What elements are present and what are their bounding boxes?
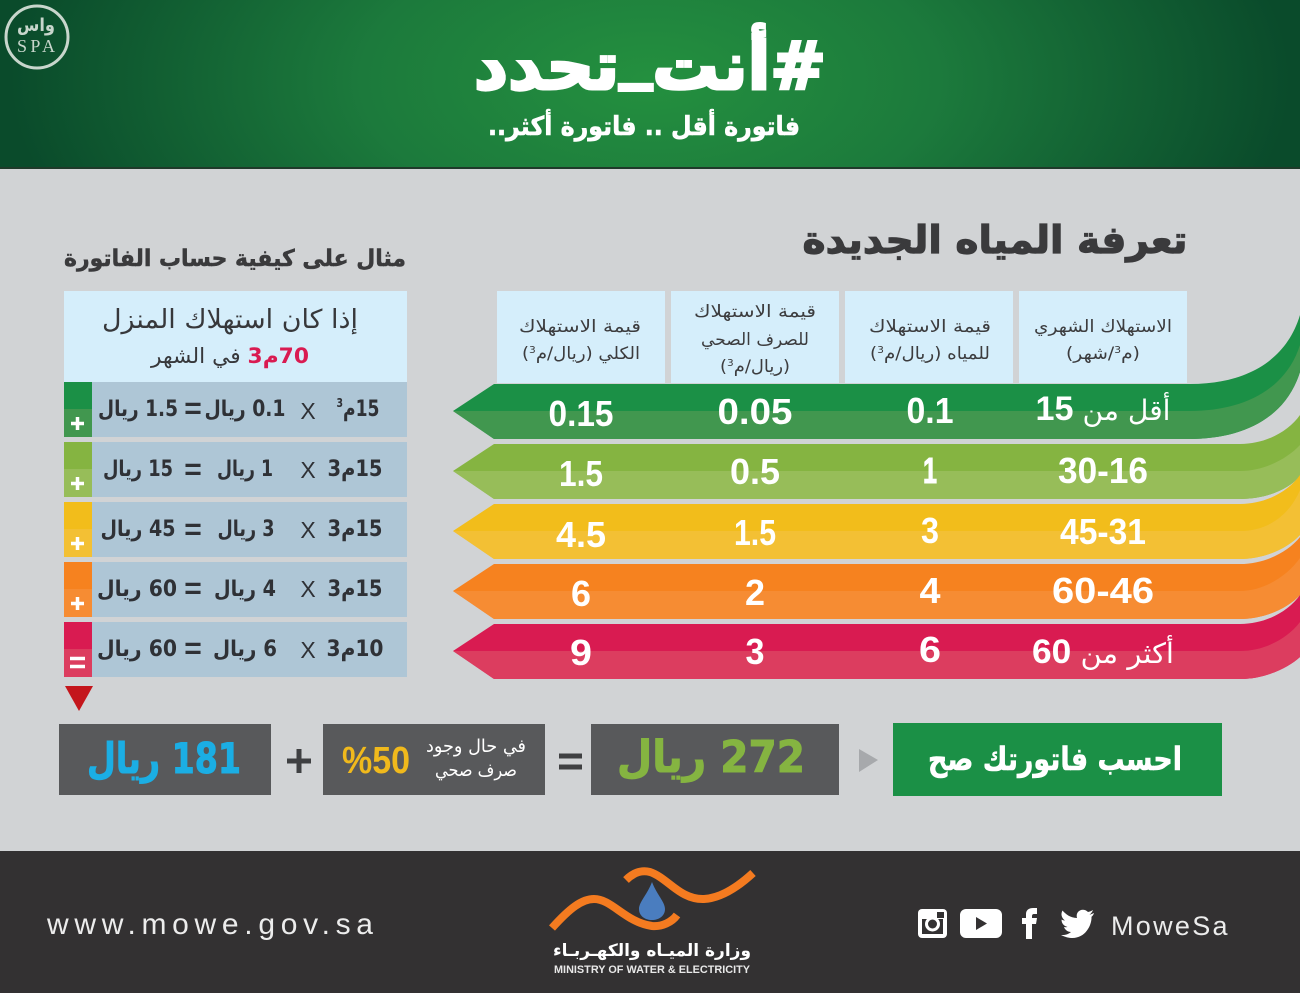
tariff row 4: orange — [453, 537, 1300, 619]
example row 1 — [64, 382, 407, 437]
small arrow — [859, 749, 878, 772]
icon: facebook — [1022, 908, 1037, 939]
tariff row 1: green — [453, 315, 1300, 439]
tariff row 3: yellow: 45-31 — [1060, 511, 1146, 552]
sewage surcharge box: %50 — [342, 740, 410, 782]
example row 5: = — [184, 632, 202, 665]
sewage surcharge box: في حال وجود — [426, 736, 526, 757]
example row 4: X — [300, 576, 316, 602]
social handle: MoweSa — [1111, 911, 1230, 941]
header: water value: 3 — [877, 345, 884, 356]
example row 3 — [64, 502, 407, 557]
tariff row 4: orange: 6 — [571, 573, 591, 614]
icon: instagram — [918, 909, 947, 938]
example row 5: 60 ريال — [97, 637, 177, 662]
plus sign — [287, 749, 311, 773]
header: sewage value: 3 — [727, 358, 734, 369]
sewage surcharge box: صرف صحي — [435, 760, 517, 781]
example row 1: 15م — [343, 397, 386, 422]
tariff table column headers — [497, 291, 1187, 383]
result box: 272 riyal — [591, 724, 839, 795]
title: تحدد — [474, 28, 619, 105]
tariff row 5: red: 6 — [919, 629, 941, 670]
icon: twitter — [1061, 910, 1094, 938]
tariff row 4: orange: 2 — [745, 572, 765, 613]
call to action button: احسب فاتورتك صح — [928, 740, 1182, 778]
example row 2: 1 ريال — [217, 457, 273, 482]
call to action button — [893, 723, 1222, 796]
header: water value: للمياه (ريال/م — [884, 344, 983, 364]
header: total value: الكلي (ريال/م — [536, 344, 634, 364]
tariff row 3: yellow: 1.5 — [734, 512, 776, 553]
SPA logo — [6, 6, 68, 68]
example row 2: 15م3 — [328, 457, 382, 482]
heading: bill calculation example: مثال على كيفية حساب الفاتورة — [64, 246, 406, 272]
tariff row 5: red: 3 — [746, 631, 764, 672]
example row 4: 4 ريال — [214, 577, 276, 602]
tariff row 3: yellow: 3 — [921, 510, 939, 551]
heading: new water tariff: تعرفة المياه الجديدة — [802, 218, 1188, 262]
example row 3: 45 ريال — [100, 517, 176, 542]
example row 3: = — [184, 513, 202, 546]
tariff row 2: light green: 1.5 — [559, 453, 603, 494]
tariff row 2: light green — [453, 415, 1300, 499]
example panel: household consumption — [64, 291, 407, 383]
tariff row 1: green: 0.05 — [718, 391, 792, 432]
tariff row 1: green: 0.15 — [548, 393, 614, 434]
example row 4 — [64, 562, 407, 617]
tariff row 3: yellow: 4.5 — [556, 514, 606, 555]
tariff row 5: red: 9 — [570, 632, 592, 673]
header: water value: قيمة الاستهلاك — [869, 317, 991, 337]
example row 2: = — [184, 453, 202, 486]
example row 2: 15 ريال — [103, 457, 173, 482]
header: sewage value: للصرف الصحي — [701, 330, 809, 350]
arrow: down to total — [65, 686, 93, 711]
title: _ — [619, 14, 652, 91]
tariff row 1: green: أقل من 15 — [1036, 390, 1170, 428]
example row 4: 60 ريال — [97, 577, 177, 602]
example row 3: 3 ريال — [218, 517, 274, 542]
result box: 181 riyal — [59, 724, 271, 795]
tariff row 2: light green: 1 — [923, 450, 937, 491]
SPA logo: واس — [17, 15, 55, 36]
example row 2 — [64, 442, 407, 497]
ministry logo: MINISTRY OF WATER & ELECTRICITY — [554, 964, 751, 976]
example row 1: = — [184, 392, 202, 425]
result box: 181 riyal: 181 ريال — [87, 734, 241, 783]
header: monthly consumption: الاستهلاك الشهري — [1034, 317, 1172, 337]
header: water value — [845, 291, 1013, 383]
tariff row 2: light green: 0.5 — [730, 451, 780, 492]
tariff row 5: red — [453, 595, 1300, 679]
title: #أنت — [652, 28, 825, 105]
tariff row 2: light green: 30-16 — [1058, 450, 1148, 491]
example row 4: 15م3 — [328, 577, 382, 602]
header: total value — [497, 291, 665, 383]
result box: 272 riyal: 272 ريال — [617, 732, 805, 783]
header: water value: ) — [870, 344, 877, 364]
header: monthly consumption: (م — [1121, 344, 1138, 364]
icon: youtube — [960, 909, 1002, 938]
header: total value: ) — [522, 344, 529, 364]
equals sign — [559, 756, 582, 767]
header: monthly consumption — [1019, 291, 1187, 383]
example row 5: X — [300, 637, 316, 663]
example row 1: X — [300, 398, 316, 424]
SPA logo: SPA — [17, 36, 55, 56]
header: sewage value: قيمة الاستهلاك — [694, 302, 816, 322]
example row 1: 1.5 ريال — [98, 397, 178, 422]
example row 3: 15م3 — [328, 517, 382, 542]
subtitle: فاتورة أقل .. فاتورة أكثر.. — [488, 109, 800, 142]
tariff row 4: orange: 4 — [920, 570, 940, 611]
ministry logo — [552, 871, 753, 976]
example row 4: = — [184, 572, 202, 605]
example row 5: 6 ريال — [213, 637, 277, 662]
tariff row 4: orange: 60-46 — [1052, 570, 1154, 611]
header: monthly consumption: 3 — [1114, 345, 1121, 356]
example panel: household consumption: 70م3 في الشهر — [150, 344, 309, 368]
website url: www.mowe.gov.sa — [46, 908, 379, 941]
header banner — [0, 0, 1300, 169]
tariff row 1: green: 0.1 — [906, 390, 954, 431]
header: monthly consumption: /شهر) — [1066, 344, 1114, 364]
header: sewage value: ) — [720, 357, 727, 377]
sewage surcharge box — [323, 724, 545, 795]
tariff row 3: yellow — [453, 475, 1300, 559]
example row 1: 0.1 ريال — [204, 397, 286, 422]
example row 5: 10م3 — [326, 637, 384, 662]
footer — [0, 851, 1300, 993]
tariff row 5: red: أكثر من 60 — [1032, 633, 1174, 671]
example row 3: X — [300, 517, 316, 543]
header: total value: قيمة الاستهلاك — [519, 317, 641, 337]
ministry logo: وزارة الميـاه والكهـربـاء — [553, 941, 751, 961]
header: sewage value — [671, 291, 839, 383]
example panel: household consumption: إذا كان استهلاك المنزل — [102, 305, 358, 335]
example row 1: 3 — [336, 396, 343, 410]
header: total value: 3 — [529, 345, 536, 356]
example row 2: X — [300, 457, 316, 483]
header: sewage value: (ريال/م — [734, 357, 787, 377]
example row 5 — [64, 622, 407, 677]
